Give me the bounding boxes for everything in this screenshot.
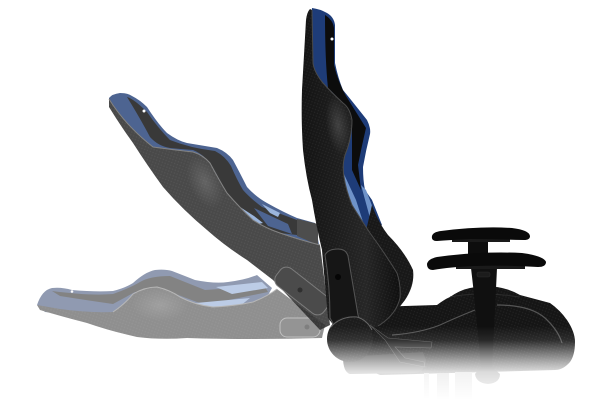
lowest reclined backrest (most faded) xyxy=(37,270,325,339)
recline bracket and pivot mechanism xyxy=(325,249,432,374)
armrest lower post and foot xyxy=(471,268,500,384)
upright backrest xyxy=(302,8,413,340)
upright: piping xyxy=(312,10,400,326)
chair base legs xyxy=(424,372,472,400)
low: inner and blue side xyxy=(37,270,272,318)
upright: shell xyxy=(302,9,400,340)
lower armrest xyxy=(427,252,546,270)
middle reclined backrest (semi faded) xyxy=(109,93,332,330)
low: bracket xyxy=(280,318,320,337)
middle: shell xyxy=(109,98,330,330)
backrest hinge bracket xyxy=(325,249,362,325)
low: shell xyxy=(37,287,325,339)
seat piping xyxy=(392,305,562,343)
middle: blue rim and inner xyxy=(109,93,320,250)
white bottom fade over seat and base xyxy=(322,326,600,400)
base plate xyxy=(343,352,426,374)
upright: black side bolster xyxy=(360,205,413,327)
upper armrest xyxy=(432,227,530,256)
upright: blue side xyxy=(308,8,382,245)
pivot disc xyxy=(327,316,373,362)
mechanism links xyxy=(370,325,432,367)
seat cushion xyxy=(345,286,575,375)
middle: bracket xyxy=(272,264,332,318)
